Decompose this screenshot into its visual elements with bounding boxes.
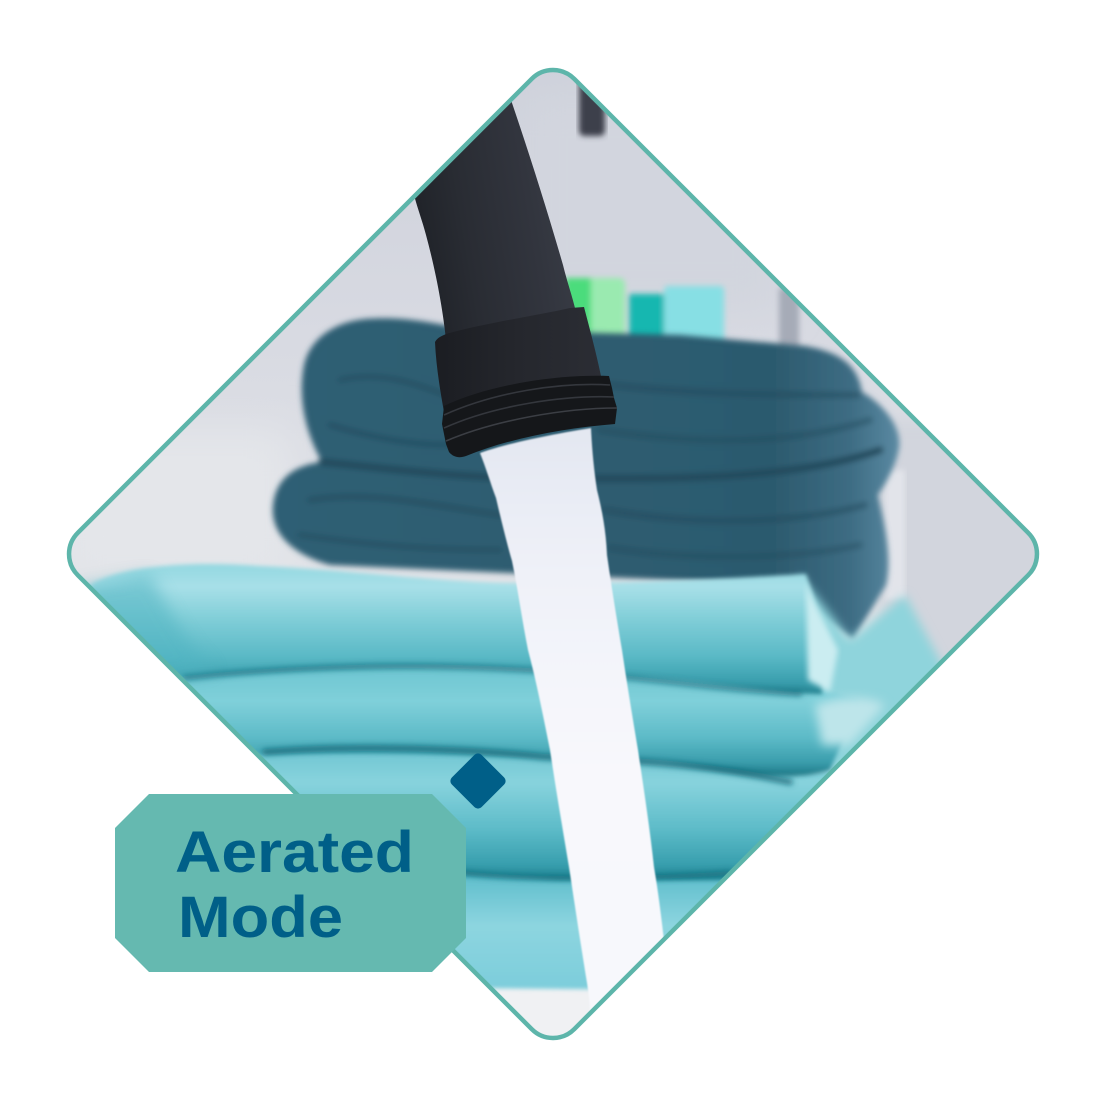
towel seams bbox=[185, 666, 800, 878]
mode label badge bbox=[115, 794, 466, 972]
background wall fixture bbox=[579, 70, 605, 136]
right towel fringe bbox=[806, 576, 944, 770]
background bottles bbox=[565, 278, 799, 350]
dark towel folds bbox=[300, 377, 880, 557]
light teal towel stack bbox=[60, 564, 945, 990]
infographic canvas bbox=[66, 68, 1040, 1040]
second towel bbox=[170, 665, 860, 776]
badge text bbox=[175, 820, 414, 950]
dark towel stack bbox=[273, 318, 899, 640]
water stream bbox=[480, 428, 664, 1012]
small diamond accent bbox=[448, 751, 508, 811]
third towel bbox=[240, 746, 860, 880]
faucet threaded aerator bbox=[442, 376, 617, 457]
faucet spout bbox=[414, 100, 576, 340]
fourth towel bbox=[455, 872, 722, 992]
badge text: Aerated bbox=[175, 820, 414, 885]
badge text: Mode bbox=[178, 885, 343, 950]
towel left shadow fold bbox=[82, 568, 190, 654]
top towel bbox=[90, 564, 823, 694]
faucet collar bbox=[435, 307, 601, 412]
